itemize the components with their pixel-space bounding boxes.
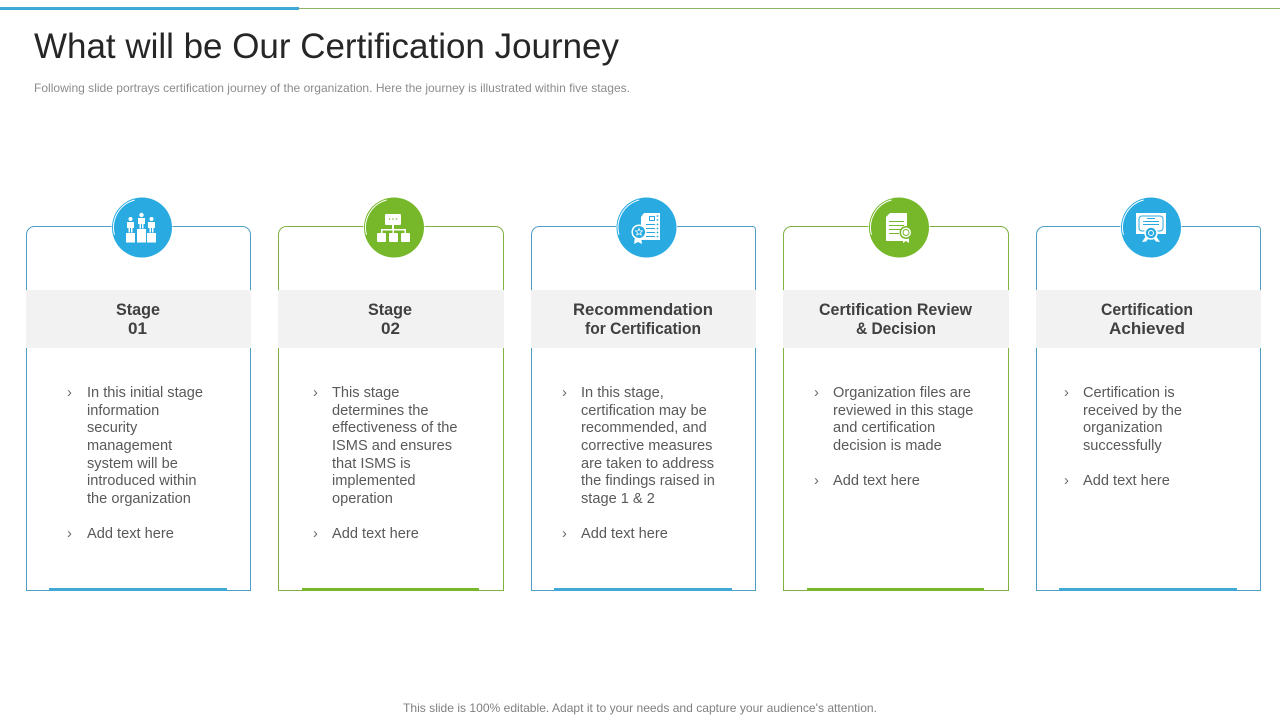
text: recommendation bullets: In this stage,	[581, 385, 664, 401]
text: stage 01 bullets	[67, 385, 203, 542]
text: stage 02 bullets: ISMS and ensures	[332, 438, 452, 454]
text: achieved bullets: successfully	[1083, 438, 1162, 454]
heading: stage 01: Stage	[116, 300, 160, 319]
text: stage 01 bullets: security	[87, 420, 138, 436]
text: achieved bullets: ›	[1064, 385, 1069, 401]
text: stage 02 bullets: This stage	[332, 385, 399, 401]
text: stage 01 bullets: In this initial stage	[87, 385, 203, 401]
text: stage 02 bullets: Add text here	[332, 526, 419, 542]
text: recommendation bullets: Add text here	[581, 526, 668, 542]
text: stage 01 bullets: Add text here	[87, 526, 174, 542]
text: stage 02 bullets: that ISMS is	[332, 456, 411, 472]
heading: recommendation	[573, 300, 713, 338]
text: review bullets: reviewed in this stage	[833, 403, 973, 419]
text: recommendation bullets: are taken to address	[581, 456, 714, 472]
text: review bullets: Add text here	[833, 473, 920, 489]
text: recommendation bullets: certification may be	[581, 403, 707, 419]
heading: recommendation: for Certification	[585, 319, 701, 338]
heading: stage 02: Stage	[368, 300, 412, 319]
text: achieved bullets: Add text here	[1083, 473, 1170, 489]
text: stage 02 bullets: ›	[313, 385, 318, 401]
text: review bullets: Organization files are	[833, 385, 971, 401]
icon: certificate	[1116, 197, 1182, 258]
panel: stage 01	[26, 226, 251, 591]
icon: podium figures	[107, 197, 173, 258]
text: stage 02 bullets: implemented	[332, 473, 416, 489]
heading: stage 01	[116, 300, 160, 338]
text: stage 02 bullets: determines the	[332, 403, 429, 419]
heading: review and decision: & Decision	[856, 319, 936, 338]
heading: stage 02	[368, 300, 412, 338]
text: recommendation bullets: recommended, and	[581, 420, 707, 436]
heading: stage 01: 01	[128, 319, 147, 338]
text: recommendation bullets: the findings raised in	[581, 473, 715, 489]
heading: review and decision: Certification Review	[819, 300, 972, 319]
text: stage 01 bullets: information	[87, 403, 159, 419]
panel: recommendation for certification	[531, 226, 756, 591]
text: review bullets: ›	[814, 473, 819, 489]
heading: stage 02: 02	[381, 319, 400, 338]
heading: recommendation: Recommendation	[573, 300, 713, 319]
panel: certification achieved	[1036, 226, 1261, 591]
text: stage 02 bullets: operation	[332, 491, 393, 507]
text: review bullets: ›	[814, 385, 819, 401]
icon: document with award badge	[612, 197, 677, 258]
text: stage 02 bullets: effectiveness of the	[332, 420, 457, 436]
text: achieved bullets	[1064, 385, 1182, 489]
text: review bullets	[814, 385, 973, 489]
title: What will be Our Certification Journey	[34, 26, 619, 66]
text: review bullets: and certification	[833, 420, 935, 436]
text: achieved bullets: organization	[1083, 420, 1163, 436]
text: stage 01 bullets: introduced within	[87, 473, 197, 489]
heading: certification achieved	[1101, 300, 1193, 338]
heading: review and decision	[819, 300, 972, 338]
icon: document with seal	[864, 197, 930, 258]
text: stage 02 bullets	[313, 385, 457, 542]
text: stage 01 bullets: system will be	[87, 456, 178, 472]
text: stage 01 bullets: the organization	[87, 491, 191, 507]
heading: certification achieved: Certification	[1101, 300, 1193, 319]
footer note: This slide is 100% editable. Adapt it to your needs and capture your audience's attention.	[403, 701, 877, 715]
panel: certification review and decision	[783, 226, 1009, 591]
heading: certification achieved: Achieved	[1109, 319, 1185, 338]
text: stage 02 bullets: ›	[313, 526, 318, 542]
text: recommendation bullets	[562, 385, 715, 542]
text: achieved bullets: ›	[1064, 473, 1069, 489]
text: stage 01 bullets: ›	[67, 385, 72, 401]
text: recommendation bullets: ›	[562, 385, 567, 401]
text: recommendation bullets: stage 1 & 2	[581, 491, 655, 507]
text: achieved bullets: Certification is	[1083, 385, 1175, 401]
icon: hierarchy chart	[359, 197, 425, 258]
panel: stage 02	[278, 226, 504, 591]
subtitle: Following slide portrays certification journey of the organization. Here the journey is illustrated within five stages.	[34, 81, 630, 95]
text: recommendation bullets: ›	[562, 526, 567, 542]
text: recommendation bullets: corrective measures	[581, 438, 712, 454]
text: stage 01 bullets: management	[87, 438, 172, 454]
text: achieved bullets: received by the	[1083, 403, 1182, 419]
text: stage 01 bullets: ›	[67, 526, 72, 542]
text: review bullets: decision is made	[833, 438, 942, 454]
